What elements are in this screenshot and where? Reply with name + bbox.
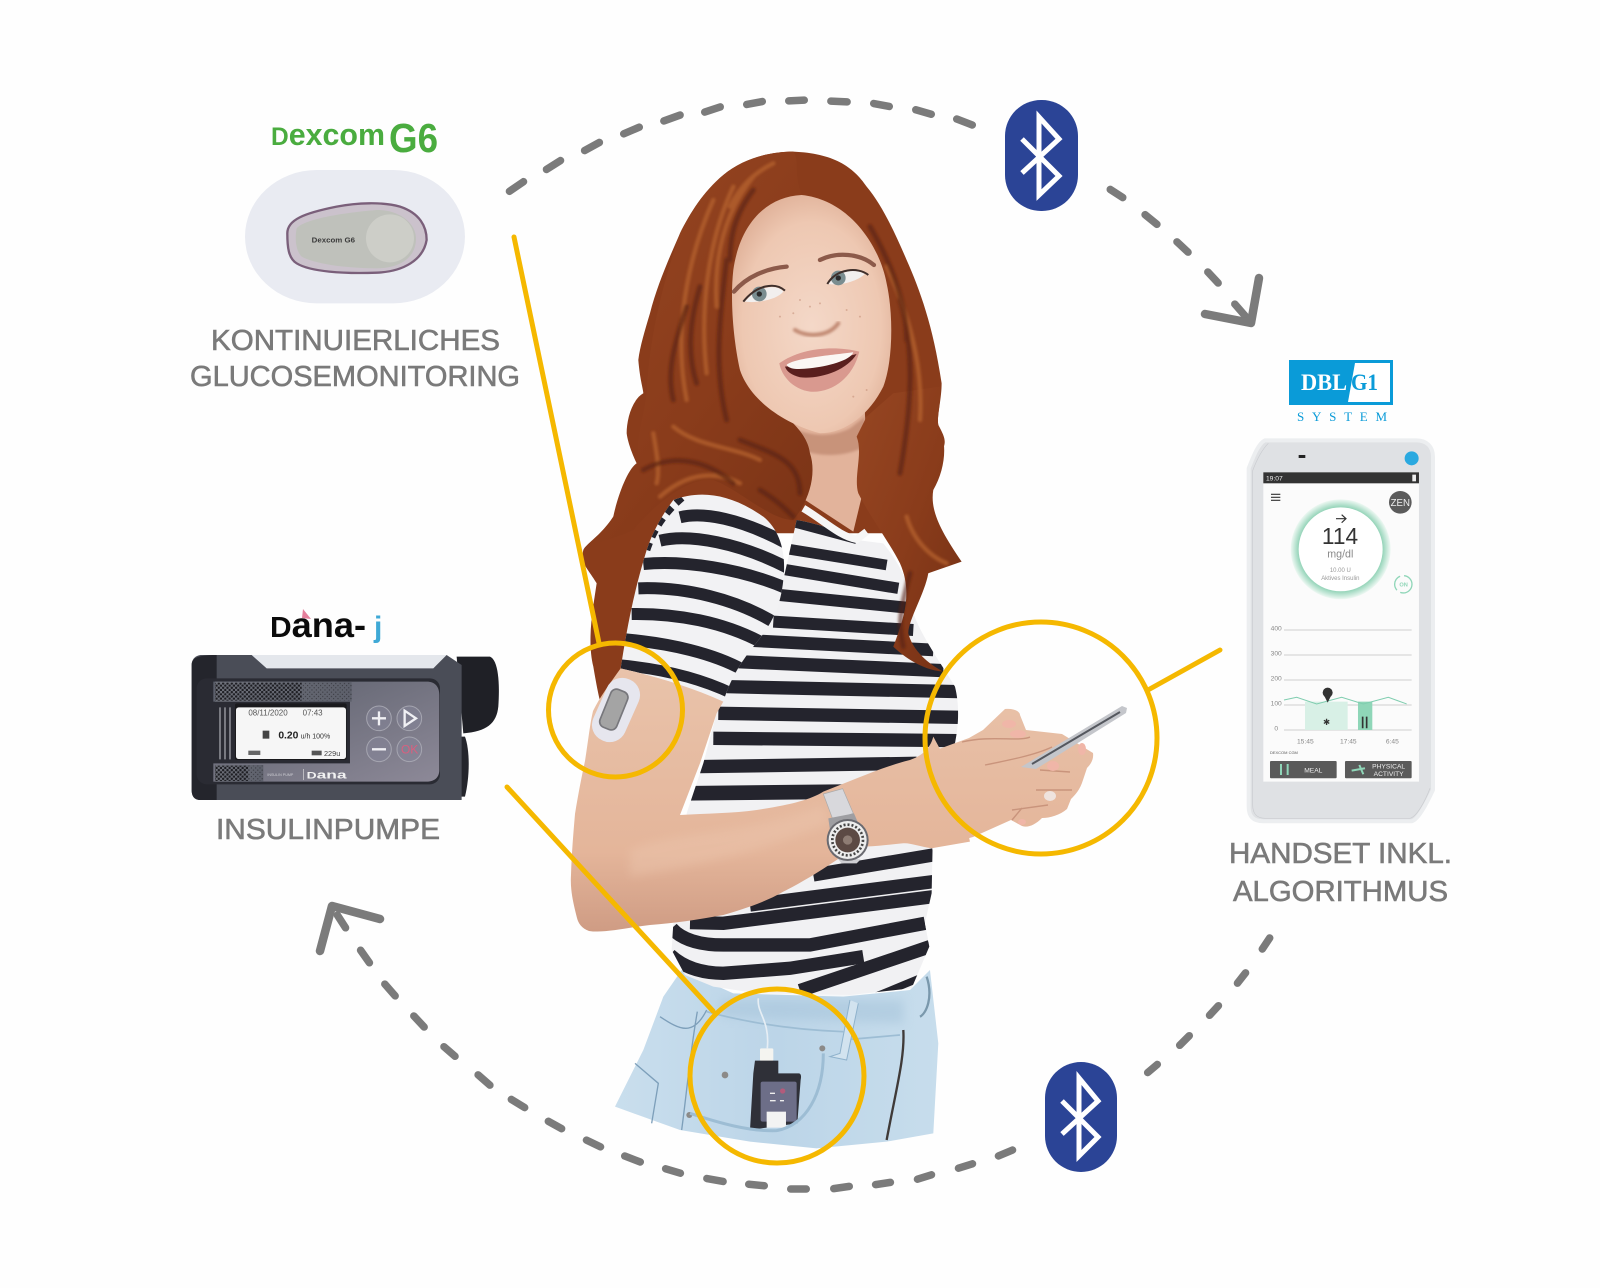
label: CGM [190,325,520,393]
handset device: mg/dl [1327,548,1353,560]
label: CGM: GLUCOSEMONITORING [190,361,520,393]
connector line: sensor [514,237,599,643]
label: CGM: KONTINUIERLICHES [211,325,500,357]
handset device: 6:45 [1386,738,1399,745]
neck [760,410,865,532]
handset device [1249,440,1433,821]
pump device [192,655,499,800]
arrow head top right [1205,278,1259,323]
connector line: handset [1148,650,1220,690]
pump device: 08/11/2020 [248,708,288,717]
callout circle: pump [690,989,864,1163]
arrow head bottom left [320,906,380,951]
handset device: ✱ [1323,717,1330,727]
pump device: Dana [307,769,348,781]
finger nails [1002,720,1086,825]
phone in hand [1021,706,1127,769]
logo: Dexcom G6 [271,115,438,161]
handset device: ACTIVITY [1374,771,1404,778]
handset device: Aktives Insulin [1321,576,1359,582]
callout circle: sensor [548,643,682,777]
pump device: INSULIN PUMP [267,773,294,777]
handset device: 100 [1271,701,1282,708]
handset device: ZEN [1391,498,1410,509]
logo: DBLG1 system: G1 [1351,370,1378,395]
logo: Dana-i: Dana- [270,606,366,645]
fingers [962,737,1072,820]
handset device: 10.00 U [1330,568,1351,574]
pump device: OK [401,743,418,757]
handset device: 300 [1271,651,1282,658]
handset device: 200 [1271,676,1282,683]
mouth [779,348,859,392]
label: Insulinpumpe: INSULINPUMPE [216,814,440,846]
handset device: DEXCOM CGM [1270,750,1298,755]
handset device: MEAL [1304,767,1323,774]
dashed cycle bottom [336,913,1271,1189]
handset device: 15:45 [1297,738,1314,745]
handset device: 400 [1271,626,1282,633]
pump device: 229u [324,749,340,758]
callout circle: handset [925,622,1157,854]
label: Handset: ALGORITHMUS [1233,876,1448,908]
logo: Dana-i: j [373,611,382,644]
hair strands [643,163,947,647]
hair back [582,152,945,712]
pump device: 0.20 [278,731,299,742]
sleeve [619,495,787,702]
logo: DBLG1 system [1289,360,1393,424]
infographic canvas [191,96,1450,1193]
hair front [583,152,962,672]
shirt [619,495,960,996]
dashed cycle top [507,100,1247,318]
nose [795,323,838,335]
icon: bluetooth bottom [1045,1062,1117,1172]
face [732,195,891,433]
panel: dexcom [190,115,520,393]
freckles and cheeks [779,299,868,398]
hand and phone [920,706,1127,845]
connector line: pump [507,787,713,1011]
handset device: 0 [1274,726,1278,733]
collar [803,508,867,539]
handset device: 19:07 [1266,475,1283,482]
handset device: ON [1399,583,1408,589]
label: Handset [1229,838,1452,908]
pump device: u/h 100% [301,734,330,741]
logo: Dexcom G6: Dexcom [271,117,385,152]
handset device: 17:45 [1340,738,1357,745]
sensor on arm [587,672,645,747]
eyes [745,287,783,302]
label: Handset: HANDSET INKL. [1229,838,1452,870]
panel: handset [1229,360,1452,908]
shirt body [670,520,960,996]
jeans [615,970,938,1148]
arm [571,668,970,932]
panel: dana pump [192,606,499,846]
pump device: 07:43 [303,708,323,717]
logo: DBLG1 system: SYSTEM [1297,409,1387,424]
pump in pocket [690,998,823,1131]
icon: bluetooth top [1005,100,1078,211]
sensor patch photo [245,170,465,303]
logo: DBLG1 system: DBL [1301,370,1347,395]
wrist watch [823,789,869,863]
sensor patch photo: Dexcom G6 [312,237,355,244]
brows [734,255,874,292]
handset device: PHYSICAL [1372,764,1405,771]
woman figure [571,152,1127,1148]
logo: Dexcom G6: G6 [389,115,438,161]
handset device: 114 [1322,523,1358,549]
